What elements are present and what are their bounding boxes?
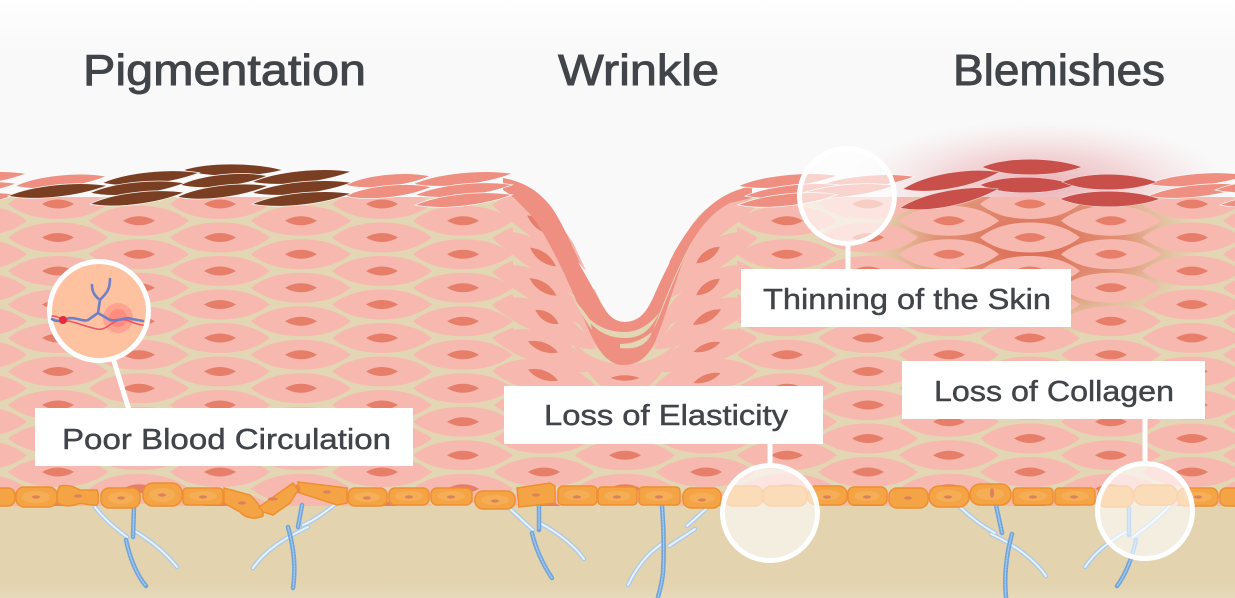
wrinkle tissue patch (513, 190, 737, 395)
icon: inflamed spot (103, 303, 133, 333)
label: thinning of the skin: Thinning of the Skin (763, 284, 1051, 316)
warped cells left of wrinkle (494, 201, 594, 393)
warped nuclei (525, 212, 723, 386)
warped cells under wrinkle (574, 306, 676, 386)
label: poor blood circulation: Poor Blood Circulation (62, 424, 391, 456)
pigmentation flakes (7, 164, 352, 210)
label: loss of elasticity (504, 386, 823, 444)
magnifier: thinning of the skin (800, 148, 894, 272)
heading: pigmentation: Pigmentation (83, 46, 366, 95)
surface layers dipping into wrinkle (503, 178, 752, 365)
icon: clot (59, 316, 67, 324)
label: loss of collagen: Loss of Collagen (934, 376, 1174, 408)
label: thinning of the skin (741, 269, 1071, 327)
heading: blemishes: Blemishes (953, 46, 1165, 95)
skin tissue with cells (0, 196, 1235, 506)
label: loss of elasticity: Loss of Elasticity (544, 400, 789, 432)
basal cell layer (0, 482, 1235, 518)
icon: blood vessels (52, 279, 143, 329)
background sky (0, 0, 1235, 210)
magnifier: loss of elasticity (722, 440, 818, 560)
dermis layer (0, 500, 1235, 598)
magnifier: poor blood circulation (50, 262, 148, 410)
red glow above blemishes (850, 121, 1230, 249)
inflamed tissue around blemishes (874, 197, 1186, 330)
label: loss of collagen (902, 361, 1205, 419)
salmon surface flakes (0, 168, 1235, 211)
heading: wrinkle: Wrinkle (558, 46, 719, 95)
warped cells right of wrinkle (656, 201, 756, 393)
cell pattern (0, 185, 1235, 510)
magnifier: loss of collagen (1098, 416, 1192, 558)
label: poor blood circulation (35, 408, 413, 466)
blemish flakes (899, 159, 1160, 216)
pink behind lifted basal cells (287, 502, 332, 506)
collagen and elastin fibers (95, 503, 1172, 597)
